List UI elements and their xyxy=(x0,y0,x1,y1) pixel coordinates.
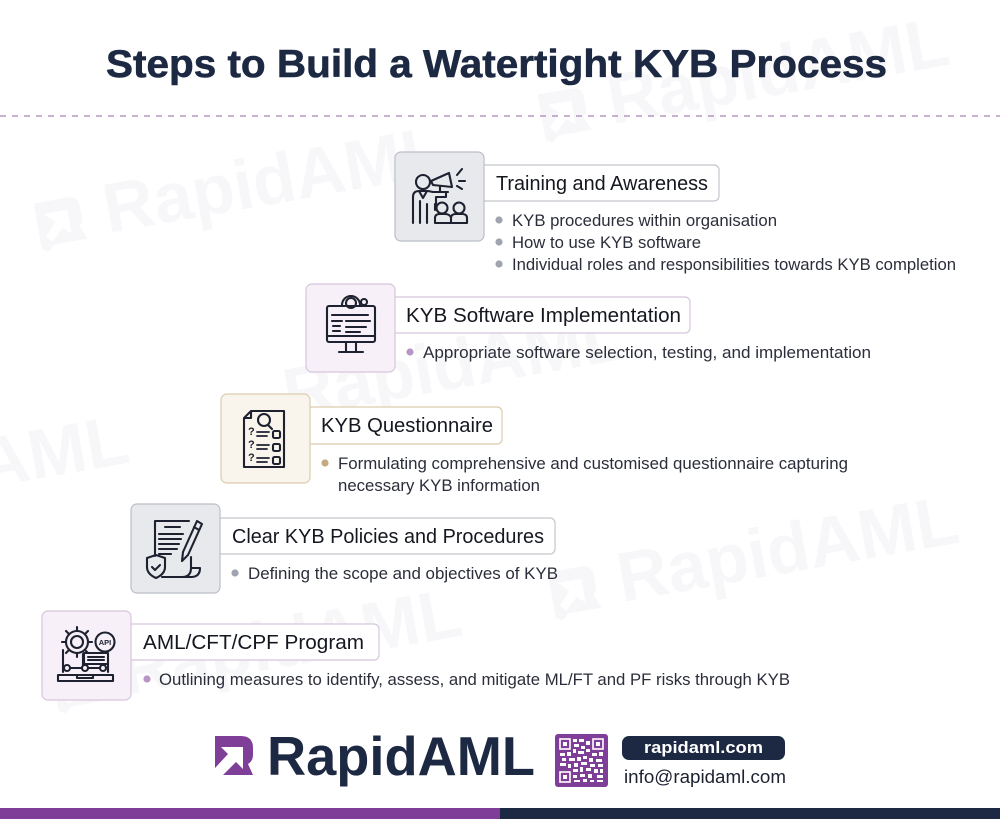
email: info@rapidaml.com xyxy=(624,767,786,787)
step: Training and Awareness xyxy=(395,152,956,274)
icon: questionnaire checklist: ? xyxy=(248,452,255,464)
website pill: rapidaml.com xyxy=(644,738,763,757)
step: KYB Questionnaire xyxy=(221,394,848,495)
heading: KYB Software Implementation: KYB Software Implementation xyxy=(406,304,681,327)
step: AML/CFT/CPF Program xyxy=(42,611,790,700)
bullet list: How to use KYB software xyxy=(512,234,701,252)
icon: gear, API badge and laptop: API xyxy=(99,638,111,647)
step: Clear KYB Policies and Procedures xyxy=(131,504,558,593)
watermarks: RapidAML xyxy=(277,296,630,433)
heading: Training and Awareness xyxy=(470,165,719,201)
icon: questionnaire checklist: ? xyxy=(248,439,255,451)
QR code xyxy=(555,734,608,787)
heading: KYB Software Implementation xyxy=(381,297,690,333)
bottom bar xyxy=(0,808,1000,819)
bullet list: Defining the scope and objectives of KYB xyxy=(248,565,558,583)
bullet list: KYB procedures within organisation xyxy=(512,212,777,230)
bullet list xyxy=(495,212,956,274)
heading: Clear KYB Policies and Procedures xyxy=(206,518,555,554)
icon: questionnaire checklist: ? xyxy=(248,426,255,438)
heading: AML/CFT/CPF Program: AML/CFT/CPF Program xyxy=(143,631,364,654)
heading: KYB Questionnaire xyxy=(296,407,502,444)
icon: questionnaire checklist xyxy=(221,394,310,483)
icon: monitor with gear xyxy=(306,284,395,372)
bullet list: Individual roles and responsibilities towards KYB completion xyxy=(512,256,956,274)
bullet list: necessary KYB information xyxy=(338,477,540,495)
icon: policy document with pen and shield xyxy=(131,504,220,593)
watermarks: RapidAML xyxy=(601,2,954,139)
watermarks: RapidAML xyxy=(97,111,450,248)
bullet list: Appropriate software selection, testing, and implementation xyxy=(423,344,871,362)
step: KYB Software Implementation xyxy=(306,284,871,372)
icon: gear, API badge and laptop xyxy=(42,611,131,700)
heading: Clear KYB Policies and Procedures: Clear KYB Policies and Procedures xyxy=(232,525,544,548)
heading: KYB Questionnaire: KYB Questionnaire xyxy=(321,414,493,437)
watermarks: RapidAML xyxy=(611,480,964,617)
bullet list xyxy=(321,455,848,495)
icon: speaker with megaphone and audience xyxy=(395,152,484,241)
heading: Training and Awareness: Training and Awareness xyxy=(496,172,708,195)
watermarks: RapidAML xyxy=(114,573,467,710)
title: Steps to Build a Watertight KYB Process xyxy=(106,43,887,86)
heading: AML/CFT/CPF Program xyxy=(117,624,379,660)
footer logo: RapidAML xyxy=(267,725,535,787)
bullet list: Outlining measures to identify, assess, and mitigate ML/FT and PF risks through KYB xyxy=(159,671,790,689)
website pill xyxy=(622,736,785,760)
bullet list: Formulating comprehensive and customised questionnaire capturing xyxy=(338,455,848,473)
